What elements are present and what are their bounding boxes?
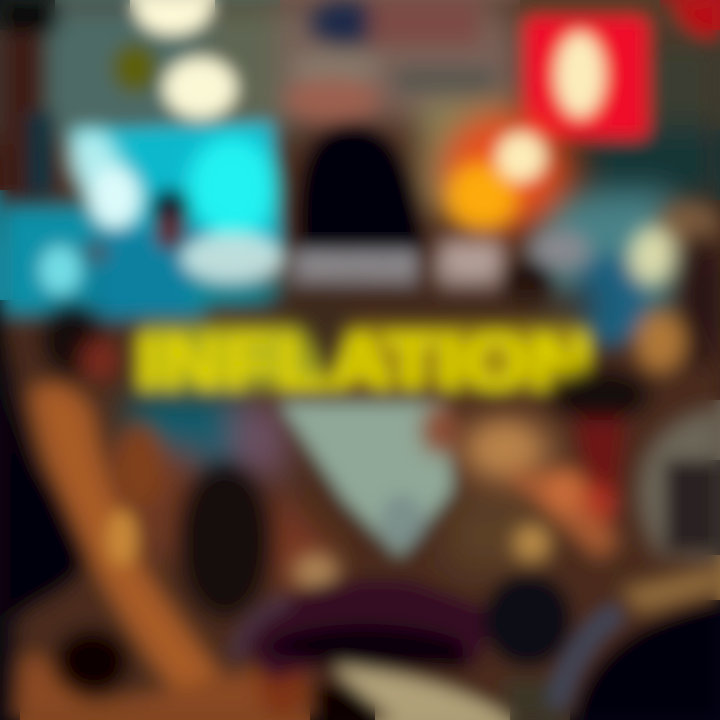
right side background figures xyxy=(530,203,720,372)
pale sleeve at bottom xyxy=(315,665,565,720)
upper wall details xyxy=(284,0,495,122)
upper-left dark head xyxy=(42,304,118,380)
central dark figure xyxy=(297,122,425,250)
navy shoulder bottom right xyxy=(556,600,720,720)
right head xyxy=(620,408,720,612)
background: upper store interior xyxy=(0,0,720,315)
heading: inflation: INFLATION xyxy=(136,320,592,405)
orange sign xyxy=(443,112,567,230)
crowd base xyxy=(100,290,590,600)
blurred heading line one xyxy=(195,240,554,309)
dark figure at top left xyxy=(0,0,55,240)
cyan panel xyxy=(0,122,282,320)
heading: inflation xyxy=(136,295,592,405)
pale receipt shape xyxy=(280,403,452,556)
left black foreground xyxy=(0,300,89,720)
small figure in cyan panel xyxy=(82,188,190,264)
right crowd: skin and red jacket xyxy=(294,369,650,590)
blurred heading line one: THE RISE OF xyxy=(195,249,500,290)
orange arm and hand xyxy=(15,383,310,720)
maroon garment xyxy=(236,572,573,680)
ceiling lights xyxy=(111,0,236,118)
red sign xyxy=(524,0,720,138)
dark centre figure xyxy=(179,462,271,618)
